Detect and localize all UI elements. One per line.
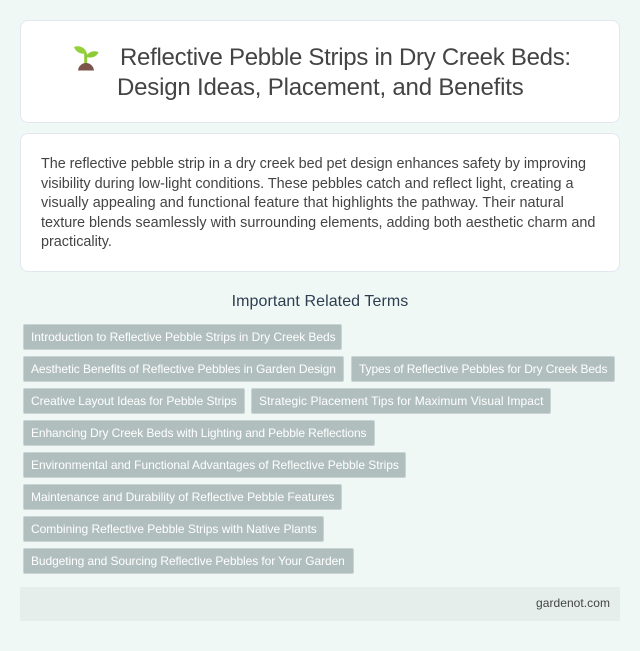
tag [23,420,375,446]
tag: Creative Layout Ideas for Pebble Strips [31,394,237,408]
tag [23,452,406,478]
tag [23,356,344,382]
tag: Types of Reflective Pebbles for Dry Creek Beds [359,362,607,376]
tag: Introduction to Reflective Pebble Strips in Dry Creek Beds [31,330,336,344]
icon: seedling [74,46,98,70]
description text: visually appealing and functional feature that highlights the pathway. Their natural [41,195,564,211]
tag: Aesthetic Benefits of Reflective Pebbles in Garden Design [31,362,336,376]
footer: site name: gardenot.com [536,596,610,610]
description text: The reflective pebble strip in a dry creek bed pet design enhances safety by improving [41,156,586,172]
tag: Enhancing Dry Creek Beds with Lighting and Pebble Reflections [31,426,366,440]
panel: description card [20,133,620,272]
description text: practicality. [41,234,112,250]
tag [23,484,342,510]
tag [23,548,354,574]
panel: title card [20,20,620,123]
tag [23,388,245,414]
tag: Maintenance and Durability of Reflective Pebble Features [31,490,334,504]
title line 1: Reflective Pebble Strips in Dry Creek Beds: [120,44,571,71]
title line 2: Design Ideas, Placement, and Benefits [117,74,524,101]
tag [23,516,324,542]
footer bar [20,587,620,621]
description text [41,156,595,250]
heading: related terms: Important Related Terms [232,293,408,310]
tag: Environmental and Functional Advantages of Reflective Pebble Strips [31,458,399,472]
tag: Strategic Placement Tips for Maximum Visual Impact [259,394,544,408]
description text: texture blends seamlessly with surrounding elements, adding both aesthetic charm and [41,215,595,231]
tag: Budgeting and Sourcing Reflective Pebbles for Your Garden [31,554,345,568]
tag [23,324,342,350]
tag [351,356,615,382]
tag: Combining Reflective Pebble Strips with Native Plants [31,522,317,536]
tag [251,388,551,414]
tag list [23,324,615,574]
description text: visibility during low-light conditions. These pebbles catch and reflect light, creating a [41,176,573,192]
